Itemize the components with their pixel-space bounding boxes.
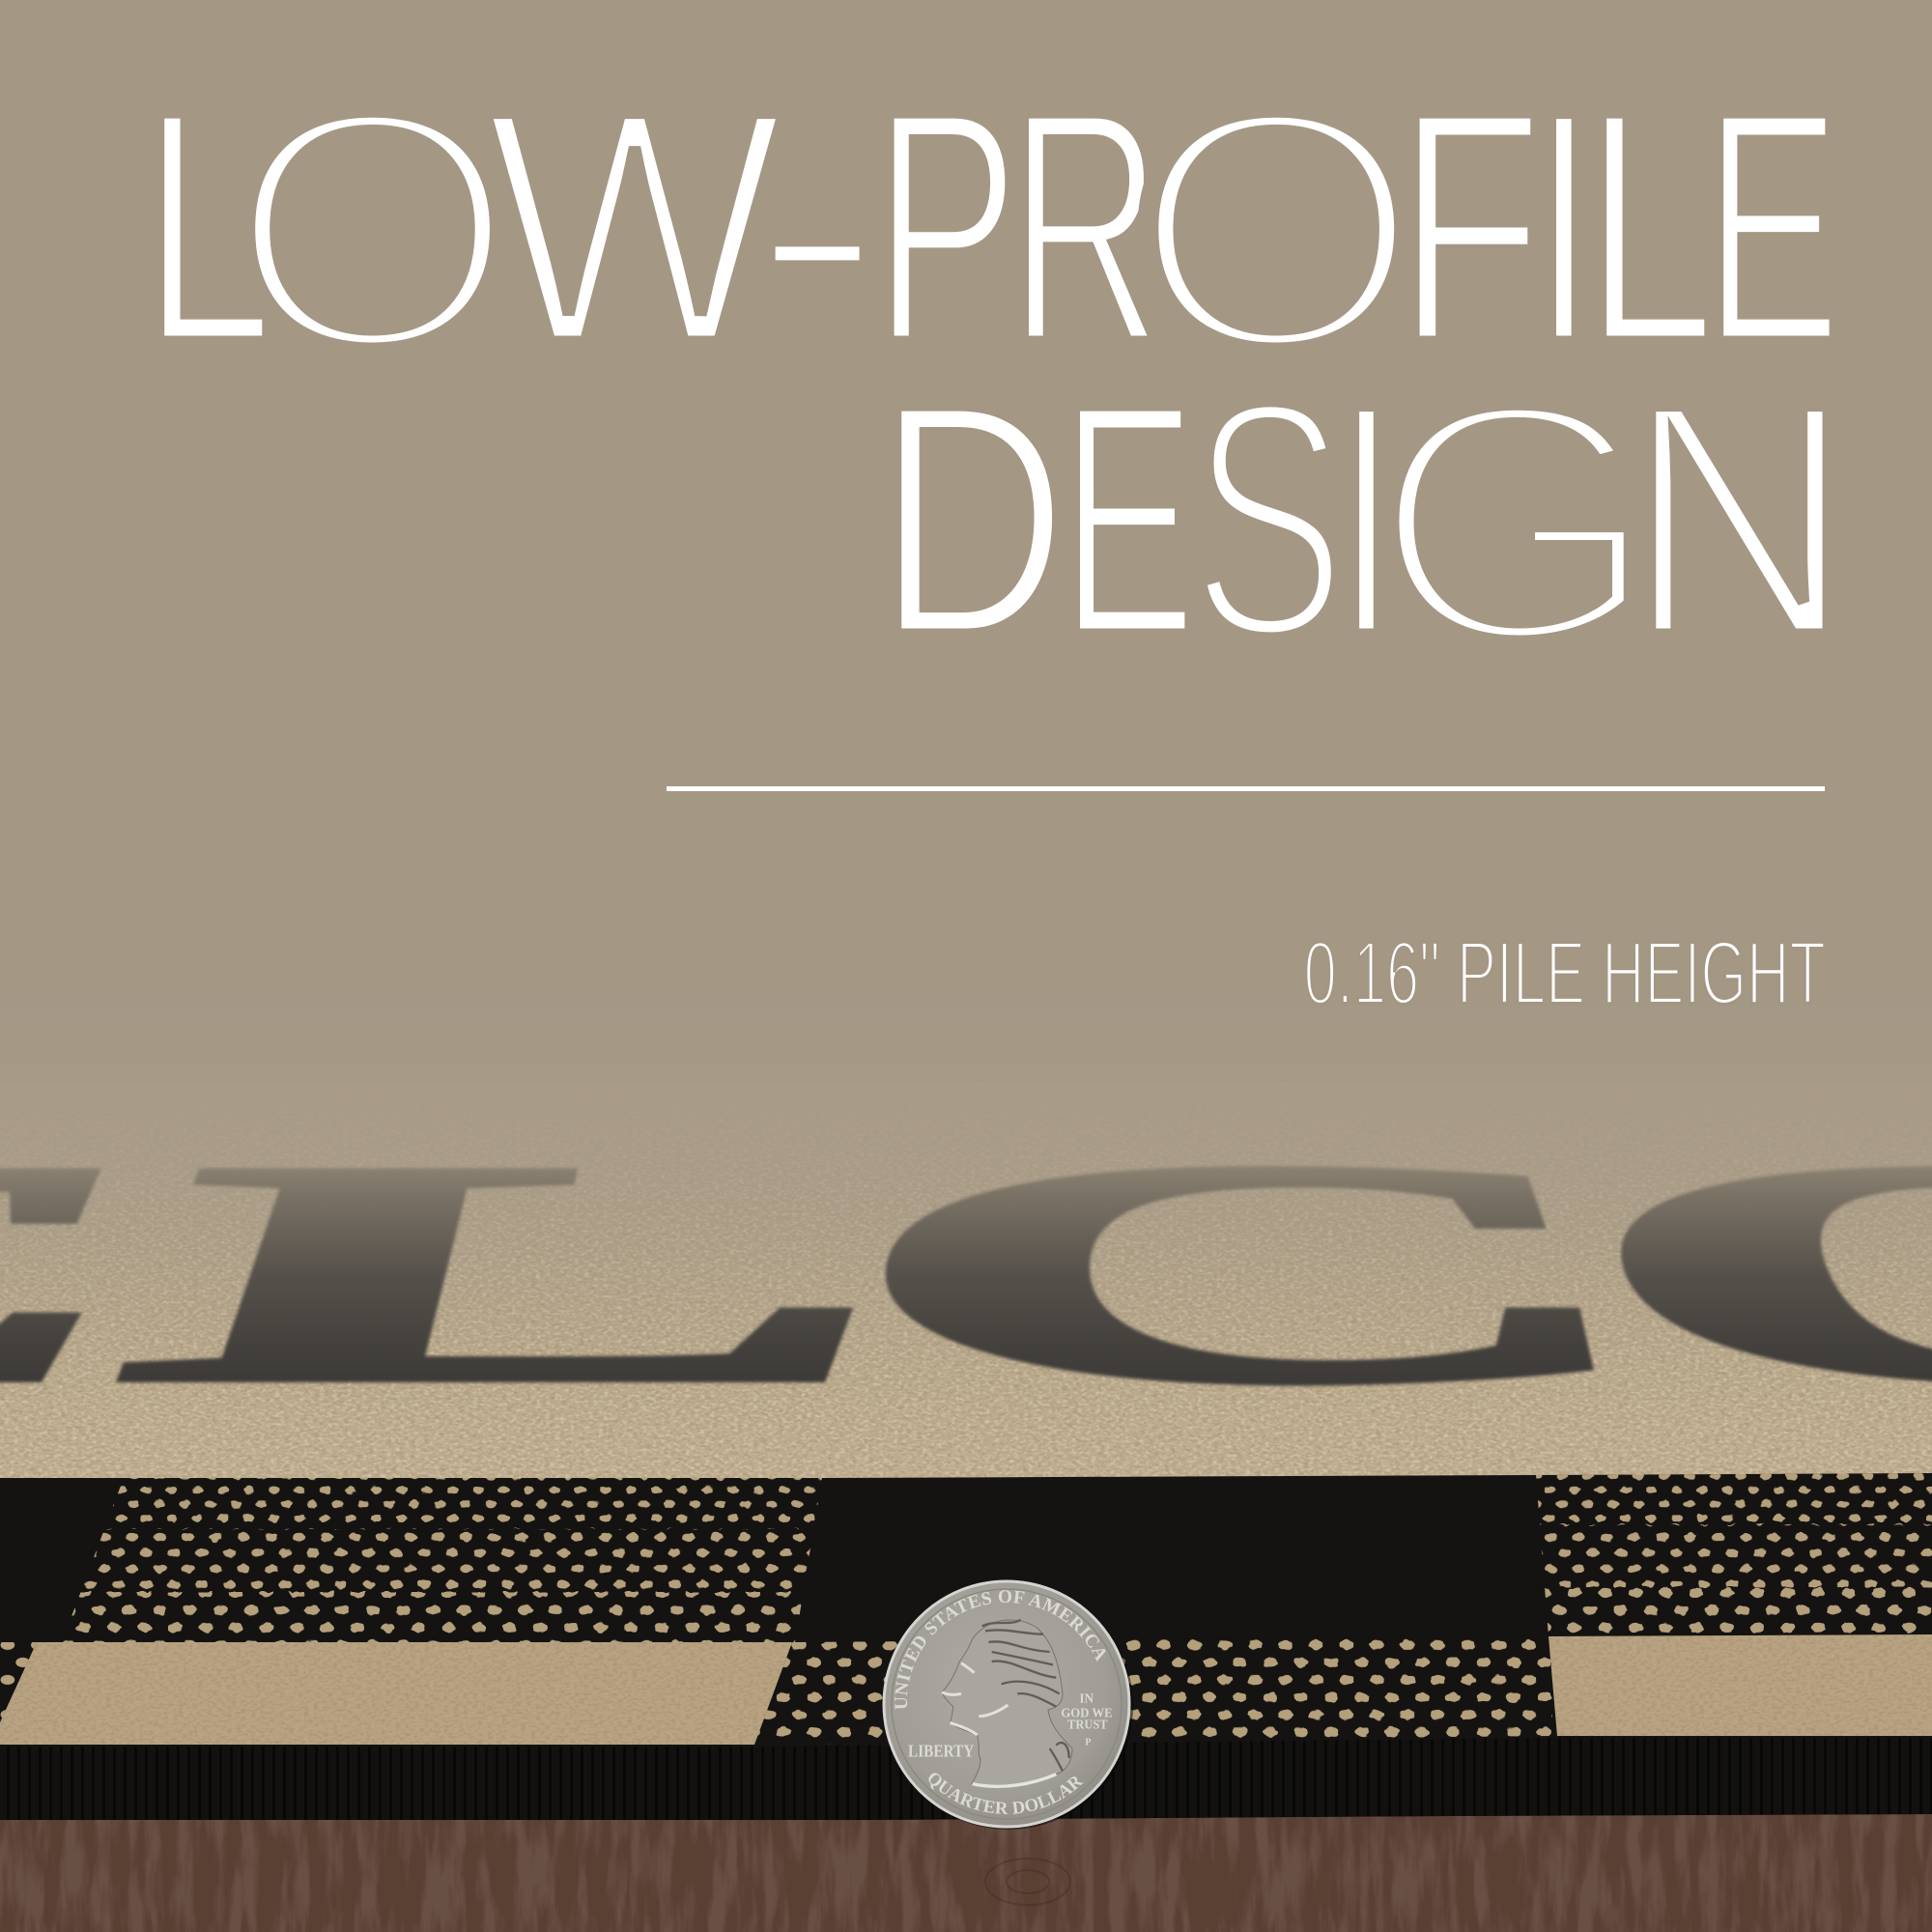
title: LOW-PROFILE DESIGN: L xyxy=(1584,43,1716,411)
rug lettering: ELCO printed on the rug: C xyxy=(834,1106,1700,1457)
title: LOW-PROFILE DESIGN: P xyxy=(873,43,1019,411)
title: LOW-PROFILE DESIGN: F xyxy=(1397,43,1544,411)
depth-of-field fade over the far rug xyxy=(0,1082,1932,1401)
subtitle: pile height: 0.16" PILE HEIGHT xyxy=(1304,923,1826,1023)
title: LOW-PROFILE DESIGN: I xyxy=(1331,334,1402,705)
title: LOW-PROFILE DESIGN: I xyxy=(1526,41,1601,413)
title: LOW-PROFILE DESIGN: - xyxy=(750,41,885,413)
cream check: lower right xyxy=(1548,1634,1932,1736)
icon: US quarter coin: LIBERTY xyxy=(908,1741,974,1760)
rug lettering: ELCO printed on the rug xyxy=(0,1106,1932,1457)
checkered rug border and wood floor xyxy=(0,1473,1932,1932)
dotted check: lower centre xyxy=(753,1633,1555,1748)
title: LOW-PROFILE DESIGN: G xyxy=(1370,329,1662,715)
title: LOW-PROFILE DESIGN: R xyxy=(1009,43,1162,411)
icon: US quarter coin: QUARTER DOLLAR xyxy=(928,1773,1084,1814)
portrait xyxy=(942,1620,1072,1787)
cream check: lower left xyxy=(0,1642,792,1745)
title: LOW-PROFILE DESIGN: N xyxy=(1624,334,1854,705)
icon: US quarter coin xyxy=(883,1580,1133,1830)
icon: US quarter coin: P xyxy=(1085,1738,1091,1748)
wood floor xyxy=(0,1806,1932,1932)
dotted check: lower left sliver xyxy=(0,1642,37,1718)
dotted check: upper right xyxy=(1526,1468,1932,1639)
rug black base and binding xyxy=(0,1473,1932,1820)
title: LOW-PROFILE DESIGN xyxy=(141,37,1854,715)
icon: US quarter coin: TRUST xyxy=(1067,1717,1108,1731)
dotted check: upper left xyxy=(63,1478,822,1642)
title: LOW-PROFILE DESIGN: E xyxy=(1704,43,1841,411)
cream check texture xyxy=(0,1633,1932,1748)
title: LOW-PROFILE DESIGN: E xyxy=(1061,336,1196,703)
title: LOW-PROFILE DESIGN: O xyxy=(226,37,518,422)
rug lettering: ELCO printed on the rug: L xyxy=(80,1106,894,1457)
title: LOW-PROFILE DESIGN: L xyxy=(141,43,272,411)
icon: US quarter coin: IN xyxy=(1079,1691,1094,1706)
divider line xyxy=(667,786,1825,791)
binding ribs xyxy=(0,1738,1932,1820)
icon: US quarter coin: GOD WE xyxy=(1061,1705,1113,1719)
title: LOW-PROFILE DESIGN: D xyxy=(876,336,1068,703)
title: LOW-PROFILE DESIGN: O xyxy=(1130,37,1422,422)
title: LOW-PROFILE DESIGN: W xyxy=(484,41,784,413)
title: LOW-PROFILE DESIGN: S xyxy=(1191,330,1347,707)
coin inscriptions: UNITED STATES OF AMERICA xyxy=(895,1590,1106,1710)
